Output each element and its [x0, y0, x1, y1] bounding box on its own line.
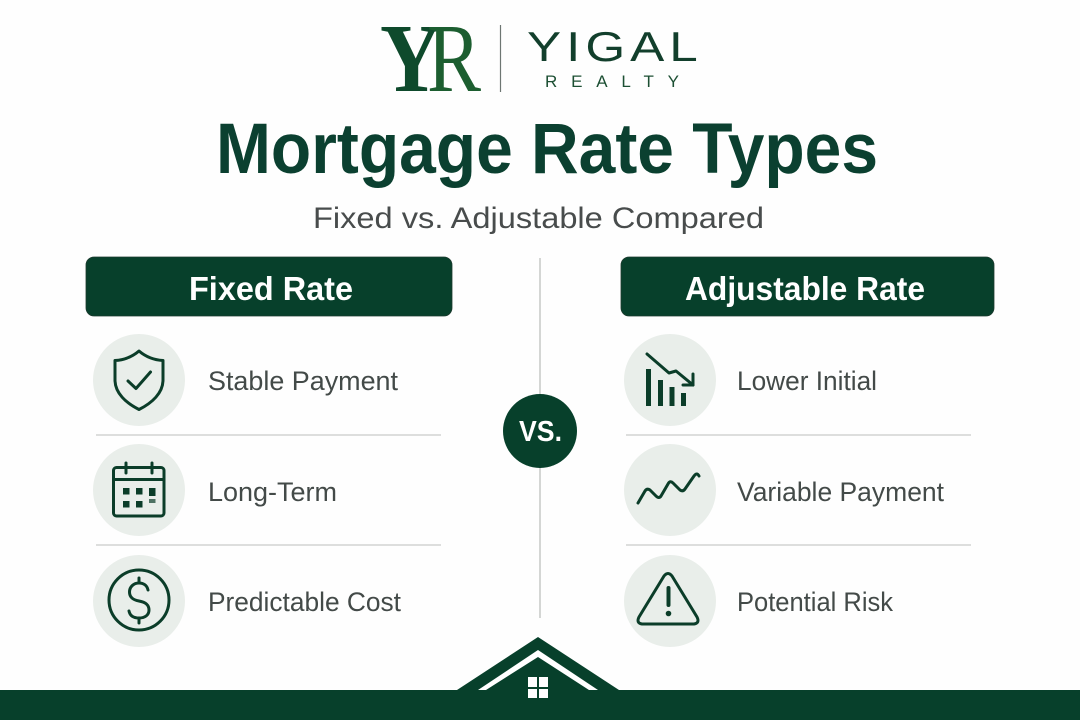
- icon: warning triangle: [638, 574, 698, 624]
- item: long-term: Long-Term: [208, 477, 337, 507]
- center divider: [539, 258, 541, 618]
- title: Mortgage Rate Types: [216, 110, 878, 189]
- adjustable rate header: Adjustable Rate: [685, 270, 925, 307]
- logo wordmark: YIGAL: [527, 23, 698, 70]
- icon: roof: [457, 637, 619, 690]
- logo monogram: [380, 5, 482, 113]
- fixed rate header: Fixed Rate: [189, 270, 353, 307]
- icon: falling chart: [646, 354, 693, 406]
- footer band with roof: [0, 637, 1080, 720]
- item: stable payment: Stable Payment: [208, 366, 399, 396]
- icon: calendar: [114, 463, 164, 516]
- item: predictable cost: Predictable Cost: [208, 587, 402, 617]
- item: variable payment: Variable Payment: [737, 477, 945, 507]
- panel: adjustable rate: [621, 257, 994, 647]
- icon: dollar coin: [109, 570, 169, 630]
- panel: fixed rate: [86, 257, 452, 647]
- logo: [380, 5, 698, 113]
- item: potential risk: Potential Risk: [737, 587, 894, 617]
- item: predictable cost: [93, 555, 402, 647]
- item: variable payment: [624, 444, 945, 536]
- icon: shield check: [115, 351, 163, 410]
- logo monogram: Y: [380, 5, 442, 113]
- item: lower initial: [624, 334, 877, 426]
- logo wordmark: [527, 23, 698, 91]
- icon: window: [528, 677, 548, 698]
- logo monogram: R: [427, 5, 482, 113]
- adjustable rate header: [621, 257, 994, 316]
- logo wordmark: REALTY: [545, 72, 679, 91]
- vs badge: VS.: [519, 416, 562, 448]
- item: stable payment: [93, 334, 399, 426]
- item: lower initial: Lower Initial: [737, 366, 877, 396]
- item: long-term: [93, 444, 337, 536]
- item: potential risk: [624, 555, 894, 647]
- vs badge: [503, 394, 577, 468]
- fixed rate header: [86, 257, 452, 316]
- icon: wavy line: [638, 474, 699, 503]
- subtitle: Fixed vs. Adjustable Compared: [313, 202, 764, 235]
